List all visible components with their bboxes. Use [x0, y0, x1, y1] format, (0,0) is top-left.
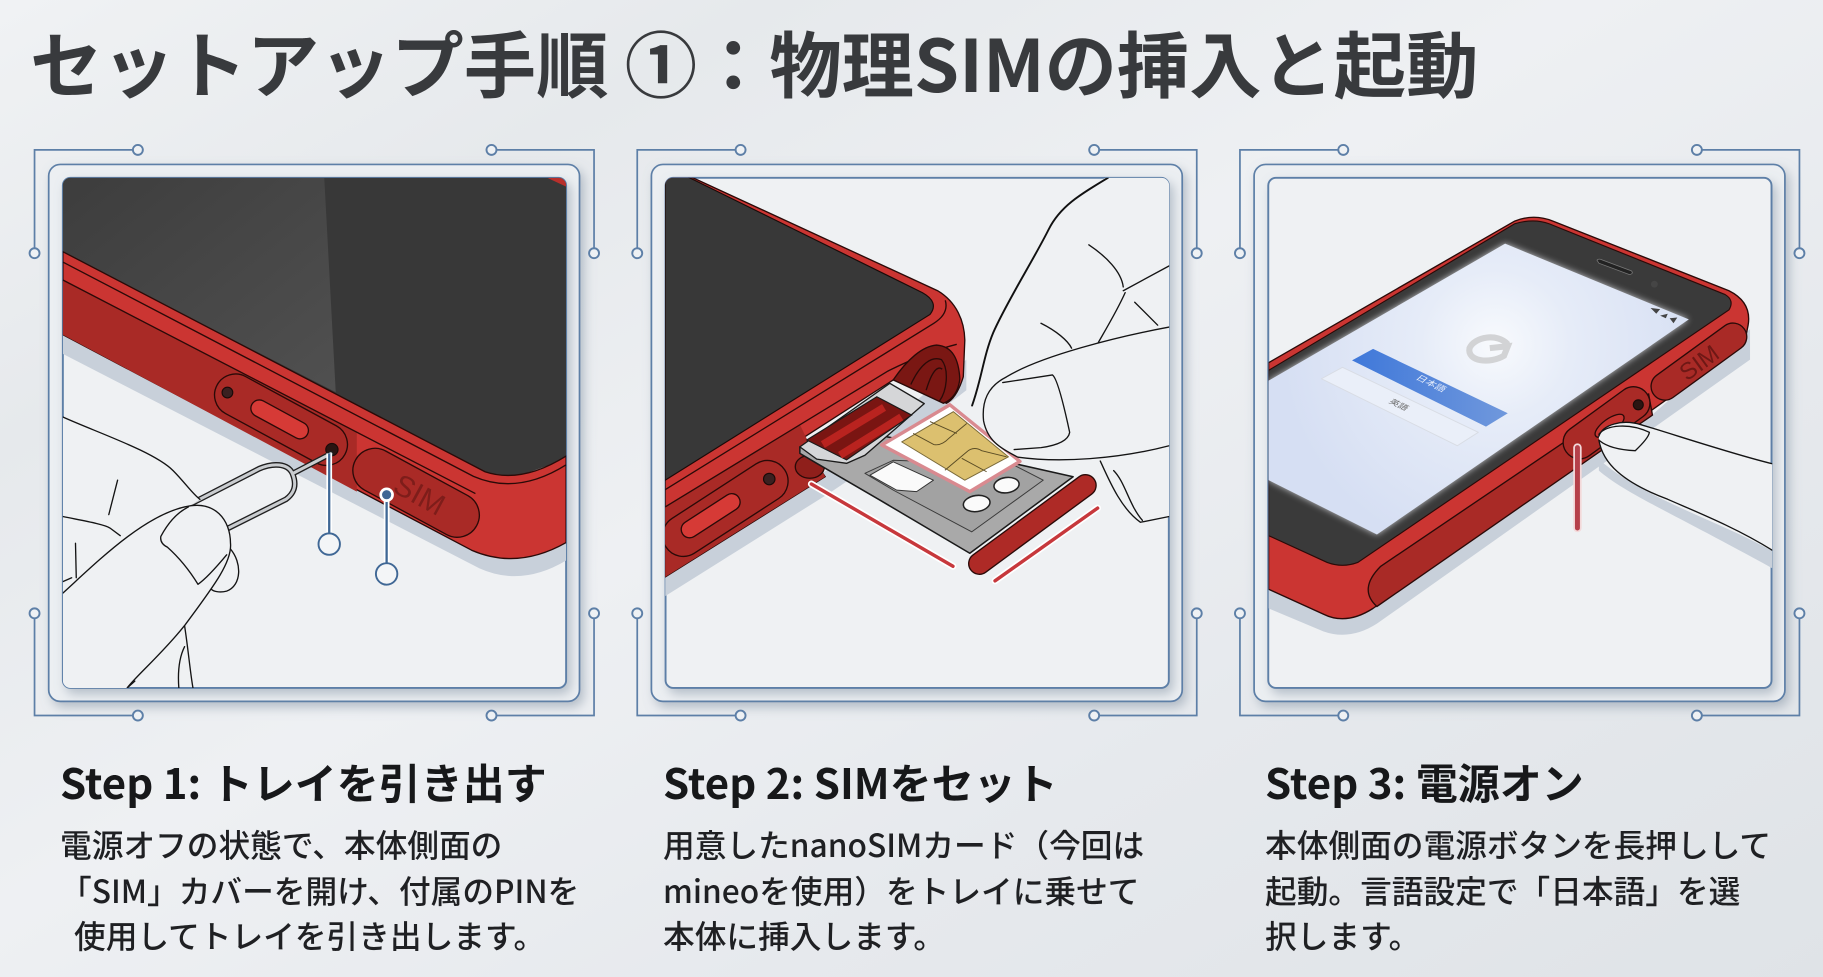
callout: pin hole marker — [319, 453, 340, 555]
panel: step 3 illustration — [1235, 145, 1804, 721]
text: 「SIM」カバーを開け、付属のPINを — [60, 866, 579, 912]
step 2 text block — [663, 751, 1144, 958]
panel: step 2 illustration — [632, 145, 1202, 721]
finger — [1599, 422, 1772, 550]
button cover — [214, 373, 348, 466]
text: 起動。言語設定で「日本語」を選 — [1265, 866, 1740, 912]
step 2 heading: Step 2: SIMをセット — [663, 751, 1058, 812]
title: セットアップ手順 ①：物理SIMの挿入と起動 — [30, 8, 1478, 113]
language button Japanese: 日本語 — [1413, 372, 1451, 394]
illustration: phone side with SIM pin — [63, 176, 566, 688]
language button English: 英語 — [1386, 396, 1412, 413]
text: 択します。 — [1265, 912, 1420, 958]
illustration panels — [28, 144, 1806, 722]
callout: SIM cover marker — [376, 487, 397, 585]
panel: step 1 illustration — [30, 145, 599, 721]
SIM cover — [352, 448, 480, 538]
step 3 text block — [1265, 751, 1771, 958]
SIM card — [882, 405, 1020, 492]
finger shadow — [1599, 459, 1772, 568]
G logo — [1469, 337, 1508, 361]
highlight brackets — [811, 484, 1098, 581]
text: 本体側面の電源ボタンを長押しして — [1265, 821, 1771, 867]
frame: step 2 circuit border — [632, 145, 1202, 721]
illustration: SIM tray and card — [655, 176, 1171, 596]
screen — [1269, 244, 1689, 535]
frame: step 3 circuit border — [1235, 145, 1804, 721]
marker: power button — [1573, 443, 1582, 532]
text: 使用してトレイを引き出します。 — [74, 912, 545, 958]
step 3 heading: Step 3: 電源オン — [1265, 751, 1584, 812]
SIM cover: SIM — [388, 468, 450, 523]
step 1 description — [60, 821, 579, 958]
hand — [990, 178, 1170, 518]
frame: step 1 circuit border — [30, 145, 599, 721]
hand — [63, 417, 200, 593]
power button cover — [1562, 386, 1651, 460]
step 3 description — [1265, 821, 1771, 958]
step 2 description — [663, 821, 1144, 958]
text: 用意したnanoSIMカード（今回は — [663, 821, 1144, 867]
tray red cap — [968, 474, 1097, 575]
tray opening — [893, 345, 960, 403]
pin hole — [222, 387, 233, 398]
power button cover — [665, 460, 789, 558]
language button English — [1321, 367, 1478, 446]
text: 本体に挿入します。 — [663, 912, 945, 958]
language button Japanese — [1352, 349, 1508, 427]
SIM cover — [1650, 322, 1748, 401]
illustration: powering on the phone — [1269, 217, 1772, 635]
SIM tray — [800, 436, 1073, 553]
step 1 heading: Step 1: トレイを引き出す — [60, 751, 547, 812]
SIM pin — [192, 454, 331, 528]
SIM cover: SIM — [1675, 341, 1725, 387]
step 1 text block — [60, 751, 579, 958]
text: mineoを使用）をトレイに乗せて — [663, 866, 1139, 912]
text: 電源オフの状態で、本体側面の — [60, 821, 502, 867]
